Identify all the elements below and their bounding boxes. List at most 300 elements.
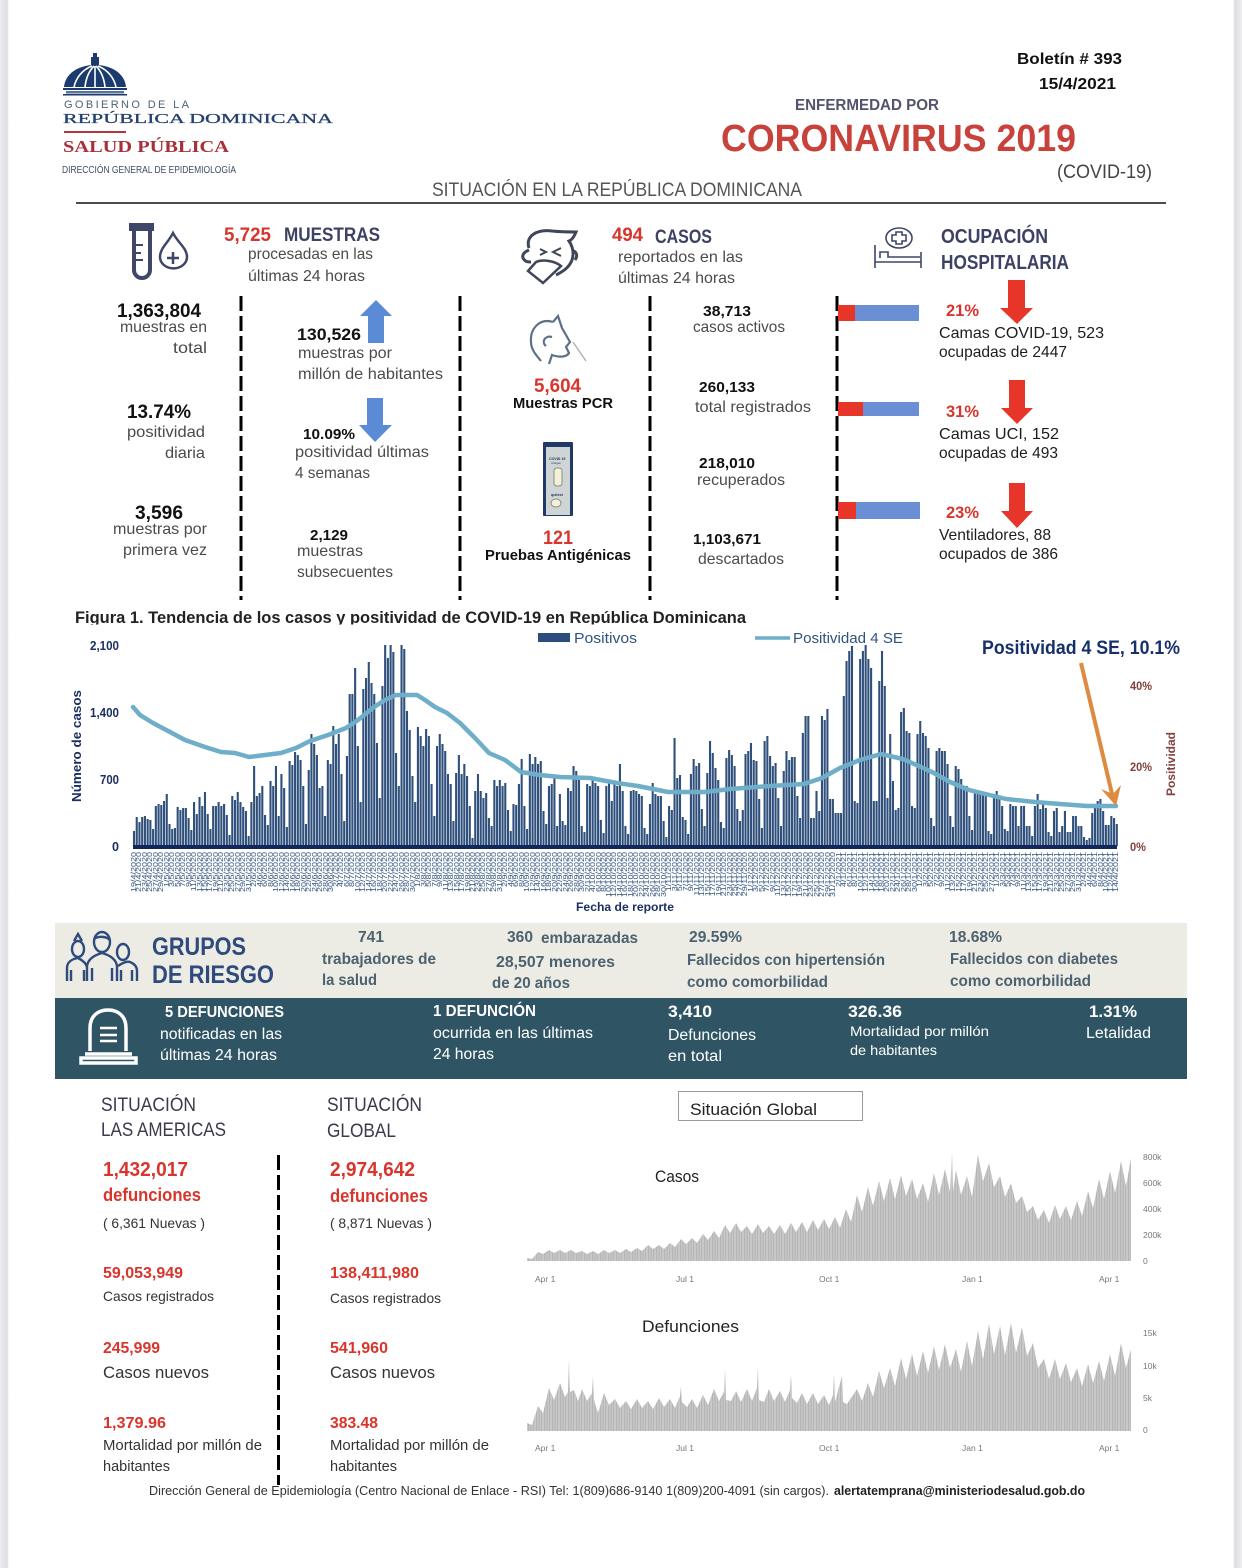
x axis dates: 15/8/2020	[453, 852, 461, 892]
x axis dates: 23/4/2020	[141, 852, 149, 892]
panel: situación global	[327, 1094, 489, 1475]
item: camas COVID-19	[838, 280, 1104, 361]
x axis dates: 23/3/2021	[1053, 852, 1061, 892]
x axis dates: 23/2/2021	[977, 852, 985, 892]
x axis dates: 4/10/2020	[589, 852, 597, 892]
x axis dates: 12/4/2021	[1107, 852, 1115, 892]
x axis dates: 18/9/2020	[545, 852, 553, 892]
x axis dates: 4/1/2021	[840, 852, 848, 887]
x axis dates: 30/1/2021	[911, 852, 919, 892]
x axis dates: 12/1/2021	[862, 852, 870, 892]
x axis dates: 27/3/2021	[1064, 852, 1072, 892]
item: camas UCI: 31%	[946, 402, 979, 421]
stat: antigen tests	[485, 528, 631, 564]
heading: muestras	[224, 225, 380, 285]
x axis dates: 5/2/2021	[927, 852, 935, 887]
x axis dates: 21/4/2020	[135, 852, 143, 892]
axis labels: 0	[1143, 1425, 1148, 1435]
panel: situación global: Casos registrados	[330, 1290, 441, 1306]
x axis dates: 3/11/2020	[671, 852, 679, 891]
stat: health workers: 741	[358, 929, 384, 946]
x axis dates: 21/2/2021	[971, 852, 979, 892]
x axis dates: 1/2/2021	[916, 852, 924, 887]
stat: 1 defunción	[433, 1001, 593, 1063]
x axis dates: 3/3/2021	[999, 852, 1007, 887]
x axis dates: 3/2/2021	[922, 852, 930, 887]
y axis left: 2,100	[90, 638, 119, 653]
x axis dates: 26/9/2020	[567, 852, 575, 892]
item: ventiladores: ocupados de 386	[939, 546, 1058, 563]
x axis dates: 24/1/2021	[894, 852, 902, 892]
x axis dates: 26/7/2020	[398, 852, 406, 892]
x axis dates: 26/1/2021	[900, 852, 908, 892]
x axis dates: 14/6/2020	[283, 852, 291, 892]
x axis dates: 16/7/2020	[370, 852, 378, 892]
x axis dates: 25/8/2020	[479, 852, 487, 892]
title: CORONAVIRUS 2019	[721, 118, 1076, 160]
x axis dates: 28/7/2020	[403, 852, 411, 892]
x axis dates: 25/11/2020	[731, 852, 739, 896]
stat: PCR samples	[513, 376, 613, 412]
stat: diabetes: Fallecidos con diabetes	[950, 951, 1118, 968]
item: ventiladores: 23%	[946, 503, 979, 522]
stat: pregnant and minors: 28,507 menores	[496, 954, 615, 971]
stat: total deaths: Defunciones	[668, 1027, 756, 1044]
panel: situación las Américas: habitantes	[103, 1458, 170, 1475]
stat: first-time samples: 3,596	[135, 503, 183, 524]
x axis dates: 17/3/2021	[1036, 852, 1044, 892]
item: camas COVID-19: ocupadas de 2447	[939, 344, 1067, 361]
x axis dates: 30/9/2020	[578, 852, 586, 892]
x axis dates: 22/1/2021	[889, 852, 897, 892]
x axis dates: 29/5/2020	[239, 852, 247, 892]
x axis dates: 18/1/2021	[878, 852, 886, 892]
heading: muestras: 5,725	[224, 225, 271, 246]
title: (COVID-19)	[1057, 162, 1152, 183]
stat: hypertension: como comorbilidad	[687, 974, 828, 991]
x axis dates: 16/9/2020	[540, 852, 548, 892]
axis labels: 200k	[1143, 1230, 1162, 1240]
stat: diabetes	[949, 929, 1118, 990]
stat: mortality: 326.36	[848, 1002, 902, 1021]
x axis dates: 1/3/2021	[993, 852, 1001, 887]
x axis dates: 2/10/2020	[584, 852, 592, 892]
x axis dates: 6/4/2021	[1091, 852, 1099, 887]
axis labels: Jul 1	[676, 1443, 694, 1453]
stat: discarded	[693, 531, 784, 568]
stat: 5 defunciones: notificadas en las	[160, 1026, 282, 1043]
x axis dates: 7/5/2020	[179, 852, 187, 887]
x axis dates: 12/10/2020	[610, 852, 618, 897]
stat: samples per million: millón de habitantes	[298, 366, 443, 383]
stat: health workers: trabajadores de	[322, 951, 436, 968]
icon: antigen test kit: quitest	[551, 493, 564, 497]
arrow: down	[359, 398, 392, 442]
axis labels: Jan 1	[962, 1443, 983, 1453]
x axis dates: 13/11/2020	[698, 852, 706, 896]
x axis dates: 11/2/2021	[944, 852, 952, 891]
panel: situación global: 383.48	[330, 1415, 378, 1432]
item: camas UCI	[838, 380, 1059, 462]
x axis dates: 8/4/2021	[1097, 852, 1105, 887]
icon: nasal swab	[531, 316, 586, 364]
panel: situación global: Casos nuevos	[330, 1363, 435, 1382]
bulletin number and date: Boletín # 393	[1017, 51, 1122, 68]
axis labels: 5k	[1143, 1393, 1153, 1403]
x axis dates: 7/3/2021	[1009, 852, 1017, 887]
x axis dates: 16/10/2020	[621, 852, 629, 897]
x axis dates: 4/6/2020	[256, 852, 264, 887]
heading: muestras: MUESTRAS	[284, 225, 380, 246]
x axis dates: 19/3/2021	[1042, 852, 1050, 892]
stat: recovered: 218,010	[699, 455, 755, 472]
panel: situación las Américas: Casos registrados	[103, 1288, 214, 1304]
x axis dates: 19/11/2020	[715, 852, 723, 896]
x axis dates: 16/6/2020	[289, 852, 297, 892]
stat: 1 defunción: ocurrida en las últimas	[433, 1025, 593, 1042]
x axis dates: 25/12/2020	[813, 852, 821, 897]
x axis dates: 20/9/2020	[551, 852, 559, 892]
x axis dates: 28/9/2020	[573, 852, 581, 892]
x axis dates: 19/4/2020	[130, 852, 138, 892]
icon: antigen test kit	[543, 442, 573, 516]
x axis dates: 1/5/2020	[163, 852, 171, 887]
icon: tombstone	[81, 1010, 136, 1063]
item: camas COVID-19: 21%	[946, 301, 979, 320]
x axis dates: 30/6/2020	[327, 852, 335, 892]
x axis dates: 9/2/2021	[938, 852, 946, 887]
y axis left: Número de casos	[69, 690, 84, 802]
x axis dates: 23/8/2020	[474, 852, 482, 892]
item: camas COVID-19: Camas COVID-19, 523	[939, 325, 1104, 342]
axis labels: 10k	[1143, 1361, 1157, 1371]
stat: total deaths: 3,410	[668, 1002, 712, 1021]
stat: first-time samples: muestras por	[113, 521, 208, 538]
x axis dates: 13/5/2020	[196, 852, 204, 892]
heading: grupos de riesgo	[152, 933, 274, 989]
x axis dates: 5/12/2020	[758, 852, 766, 892]
x axis dates: 23/11/2020	[726, 852, 734, 896]
stat: hypertension: Fallecidos con hipertensión	[687, 952, 885, 969]
x axis dates: 8/7/2020	[348, 852, 356, 887]
panel: figure 1 chart	[60, 608, 1180, 914]
arrow: up	[360, 300, 392, 343]
x axis dates: 24/6/2020	[311, 852, 319, 892]
stat: mortality: Mortalidad por millón	[850, 1023, 989, 1039]
x axis dates: 23/5/2020	[223, 852, 231, 892]
axis labels: Jan 1	[962, 1274, 983, 1284]
heading: casos: últimas 24 horas	[618, 270, 735, 287]
panel: situación las Américas: LAS AMERICAS	[101, 1120, 226, 1141]
footer: Dirección General de Epidemiología (Centro Nacional de Enlace - RSI) Tel: 1(809)686-9140 1(809)200-4091 (sin cargos).	[149, 1484, 829, 1498]
bars: positive cases	[134, 645, 1117, 846]
stat: PCR samples: Muestras PCR	[513, 395, 613, 412]
x axis dates: 22/9/2020	[556, 852, 564, 892]
logo: Gobierno de la República Dominicana, Salud Pública	[62, 53, 333, 176]
stat: total registered: 260,133	[699, 379, 755, 396]
heading: casos	[612, 225, 743, 287]
x axis dates: 3/12/2020	[752, 852, 760, 892]
x axis dates: 9/11/2020	[687, 852, 695, 891]
x axis dates: 6/1/2021	[846, 852, 854, 887]
x axis dates: 10/10/2020	[605, 852, 613, 897]
x axis dates: 27/2/2021	[988, 852, 996, 892]
x axis dates: 21/12/2020	[802, 852, 810, 897]
icon: antigen test kit: COVID 19	[549, 457, 565, 461]
panel: defunciones	[55, 998, 1187, 1079]
stat: daily positivity: positividad	[127, 424, 205, 441]
stat: mortality: de habitantes	[850, 1042, 937, 1058]
x axis dates: 14/9/2020	[534, 852, 542, 892]
icon: hospital bed	[875, 228, 921, 268]
annotation: positividad value: Positividad 4 SE, 10.1%	[982, 638, 1180, 659]
title: ENFERMEDAD POR	[795, 97, 939, 114]
x axis dates: 19/12/2020	[796, 852, 804, 897]
icon: masked face	[523, 231, 577, 283]
panel: ocupación hospitalaria	[838, 224, 1104, 563]
axis labels: Apr 1	[1099, 1443, 1120, 1453]
panel: situación las Américas: 245,999	[103, 1340, 160, 1357]
x axis dates: 9/3/2021	[1014, 852, 1022, 887]
axis labels: Jul 1	[676, 1274, 694, 1284]
stat: subsequent samples: 2,129	[310, 527, 348, 544]
y axis left: 0	[112, 839, 119, 854]
stat: PCR samples: 5,604	[534, 376, 581, 397]
x axis dates: 14/4/2021	[1112, 852, 1120, 892]
x axis dates: 12/7/2020	[359, 852, 367, 892]
panel: casos	[485, 225, 811, 568]
stat: pregnant and minors: embarazadas	[541, 930, 638, 947]
stat: samples per million	[297, 325, 443, 383]
x axis dates: 6/10/2020	[595, 852, 603, 892]
x axis dates: 8/1/2021	[851, 852, 859, 887]
x axis dates: 15/5/2020	[201, 852, 209, 892]
x axis dates: 10/1/2021	[857, 852, 865, 892]
x axis dates: 4/4/2021	[1086, 852, 1094, 887]
stat: samples per million: muestras por	[298, 345, 393, 362]
chart: global deaths: Defunciones	[642, 1317, 739, 1336]
stat: lethality: Letalidad	[1086, 1025, 1151, 1042]
axis labels	[535, 1152, 1162, 1284]
x axis dates: 5/11/2020	[676, 852, 684, 891]
x axis dates: 31/5/2020	[245, 852, 253, 892]
panel: situación las Américas: Mortalidad por millón de	[103, 1437, 262, 1454]
x axis dates: 26/6/2020	[316, 852, 324, 892]
x axis dates: 10/9/2020	[523, 852, 531, 892]
x axis dates: 11/8/2020	[442, 852, 450, 891]
x axis dates: 29/3/2021	[1069, 852, 1077, 892]
x axis dates: 11/3/2021	[1020, 852, 1028, 891]
x axis dates: 19/5/2020	[212, 852, 220, 892]
x axis dates: 24/9/2020	[562, 852, 570, 892]
x axis dates: 7/2/2021	[933, 852, 941, 887]
panel: situación las Américas	[101, 1094, 262, 1475]
stat: daily positivity	[127, 402, 205, 462]
legend: Positivos	[574, 630, 637, 647]
stat: total samples: 1,363,804	[117, 301, 201, 322]
x axis dates: 21/5/2020	[217, 852, 225, 892]
stat: diabetes: como comorbilidad	[950, 973, 1091, 990]
x axis dates: 2/7/2020	[332, 852, 340, 887]
heading: muestras: procesadas en las	[248, 246, 373, 263]
heading: casos: reportados en las	[618, 249, 743, 266]
heading: grupos de riesgo: GRUPOS	[152, 933, 246, 961]
x axis dates: 17/8/2020	[458, 852, 466, 892]
y axis left: 700	[100, 772, 119, 787]
x axis dates: 13/3/2021	[1025, 852, 1033, 892]
y axis right: 0%	[1130, 840, 1146, 854]
axis labels: Apr 1	[535, 1443, 556, 1453]
stat: lethality: 1.31%	[1089, 1002, 1137, 1021]
stat: 4-week positivity: 4 semanas	[295, 465, 370, 482]
x axis dates: 22/6/2020	[305, 852, 313, 892]
x axis dates: 17/2/2021	[960, 852, 968, 892]
axis labels: Apr 1	[1099, 1274, 1120, 1284]
panel: situación global: 2,974,642	[330, 1159, 415, 1181]
panel: muestras	[113, 223, 443, 581]
stat: discarded: 1,103,671	[693, 531, 761, 548]
item: camas UCI: ocupadas de 493	[939, 445, 1058, 462]
chart: global cases	[527, 1152, 1162, 1284]
stat: total registered: total registrados	[695, 399, 811, 416]
x axis dates: 29/8/2020	[490, 852, 498, 892]
stat: 1 defunción: 1 DEFUNCIÓN	[433, 1001, 536, 1020]
stat: total samples: total	[173, 340, 207, 357]
y axis left: 1,400	[90, 705, 119, 720]
x axis dates: 26/10/2020	[649, 852, 657, 897]
arrow: orange pointer	[1081, 663, 1121, 806]
stat: samples per million: 130,526	[297, 325, 361, 344]
item: ventiladores: Ventiladores, 88	[939, 527, 1051, 544]
x axis dates: 22/7/2020	[387, 852, 395, 892]
panel: situación las Américas: ( 6,361 Nuevas )	[103, 1215, 205, 1231]
bulletin number and date: 15/4/2021	[1039, 76, 1116, 93]
heading: ocupación hospitalaria: OCUPACIÓN	[941, 224, 1048, 248]
x axis dates: 25/5/2020	[228, 852, 236, 892]
x axis dates: 31/8/2020	[496, 852, 504, 892]
stat: daily positivity: diaria	[165, 445, 205, 462]
x axis dates: 15/2/2021	[955, 852, 963, 892]
x axis dates: 19/8/2020	[464, 852, 472, 892]
y axis right: 20%	[1130, 760, 1152, 774]
line: positividad 4 SE	[133, 695, 1116, 806]
x axis dates: 20/10/2020	[632, 852, 640, 897]
x axis dates: 30/10/2020	[660, 852, 668, 897]
bulletin number and date	[1017, 51, 1122, 93]
stat: active cases: 38,713	[703, 303, 751, 320]
panel: situación las Américas: 59,053,949	[103, 1265, 183, 1282]
heading: ocupación hospitalaria	[941, 224, 1069, 274]
stat: recovered: recuperados	[697, 472, 785, 489]
title	[721, 97, 1152, 183]
stat: daily positivity: 13.74%	[127, 402, 191, 423]
stat: pregnant and minors: 360	[507, 929, 533, 946]
x axis dates: 15/3/2021	[1031, 852, 1039, 892]
stat: first-time samples	[113, 503, 208, 559]
x axis dates: 6/7/2020	[343, 852, 351, 887]
x axis dates: 20/1/2021	[883, 852, 891, 892]
x axis dates: 18/7/2020	[376, 852, 384, 892]
label box: situación global: Situación Global	[690, 1100, 817, 1119]
axis labels: 600k	[1143, 1178, 1162, 1188]
panel: situación global: defunciones	[330, 1186, 428, 1206]
logo: Gobierno de la República Dominicana, Salud Pública: REPÚBLICA DOMINICANA	[63, 111, 333, 126]
x axis dates: 2/6/2020	[250, 852, 258, 887]
x axis dates: 17/12/2020	[791, 852, 799, 897]
x axis dates: 24/10/2020	[643, 852, 651, 897]
x axis dates: 4/7/2020	[337, 852, 345, 887]
logo: Gobierno de la República Dominicana, Salud Pública: GOBIERNO DE LA	[64, 99, 190, 111]
x axis dates: 19/2/2021	[966, 852, 974, 892]
item: camas UCI: Camas UCI, 152	[939, 426, 1059, 443]
axis labels: Oct 1	[819, 1274, 840, 1284]
panel: situación global: 541,960	[330, 1340, 388, 1357]
subtitle: SITUACIÓN EN LA REPÚBLICA DOMINICANA	[432, 179, 802, 201]
x axis dates: 8/10/2020	[600, 852, 608, 892]
chart title: Figura 1. Tendencia de los casos y positividad de COVID-19 en República Dominicana	[75, 608, 747, 627]
x axis dates: 15/12/2020	[785, 852, 793, 897]
axis labels: 0	[1143, 1256, 1148, 1266]
stat: health workers: la salud	[322, 972, 377, 989]
logo: Gobierno de la República Dominicana, Salud Pública: SALUD PÚBLICA	[63, 137, 229, 156]
stat: total deaths	[668, 1002, 756, 1065]
x axis dates: 21/8/2020	[469, 852, 477, 892]
x axis dates: 10/4/2021	[1102, 852, 1110, 892]
x axis dates: 22/10/2020	[638, 852, 646, 897]
x axis dates: 3/5/2020	[168, 852, 176, 887]
x axis dates: 13/8/2020	[447, 852, 455, 892]
x axis dates: 29/4/2020	[157, 852, 165, 892]
stat: total samples: muestras en	[120, 319, 207, 336]
stat: active cases	[693, 303, 785, 336]
x axis dates: 25/2/2021	[982, 852, 990, 892]
x axis dates: 25/4/2020	[146, 852, 154, 892]
x axis dates: 20/6/2020	[300, 852, 308, 892]
stat: antigen tests: 121	[543, 528, 573, 549]
icon: antigen test kit: Antigen	[551, 461, 562, 465]
x axis dates: 28/10/2020	[654, 852, 662, 897]
panel: situación global: 138,411,980	[330, 1265, 419, 1282]
x axis dates: 21/3/2021	[1047, 852, 1055, 892]
legend	[538, 630, 903, 647]
x axis dates: 27/11/2020	[736, 852, 744, 896]
icon: people	[67, 932, 137, 981]
stat: pregnant and minors	[492, 929, 638, 992]
x axis dates: 27/12/2020	[818, 852, 826, 897]
stat: subsequent samples	[297, 527, 393, 581]
axis labels	[535, 1328, 1157, 1453]
x axis dates: 27/5/2020	[234, 852, 242, 892]
x axis dates: 5/8/2020	[425, 852, 433, 887]
x axis dates: 13/12/2020	[780, 852, 788, 897]
y axis right: Positividad	[1164, 732, 1178, 796]
stat: active cases: casos activos	[693, 319, 785, 336]
stat: 5 defunciones: 5 DEFUNCIONES	[165, 1004, 284, 1021]
x axis dates: 7/8/2020	[431, 852, 439, 887]
x axis dates: 14/7/2020	[365, 852, 373, 892]
icon: dome	[63, 53, 127, 96]
x axis dates: 10/7/2020	[354, 852, 362, 892]
panel: situación las Américas: Casos nuevos	[103, 1363, 209, 1382]
x axis dates: 1/11/2020	[665, 852, 673, 891]
x axis dates: 12/6/2020	[278, 852, 286, 892]
heading: ocupación hospitalaria: HOSPITALARIA	[941, 252, 1069, 274]
x axis dates: 7/11/2020	[682, 852, 690, 891]
panel: situación las Américas: 1,379.96	[103, 1415, 166, 1432]
x axis dates: 16/1/2021	[873, 852, 881, 892]
panel: situación global: GLOBAL	[327, 1121, 396, 1142]
x axis dates: 2/1/2021	[835, 852, 843, 887]
